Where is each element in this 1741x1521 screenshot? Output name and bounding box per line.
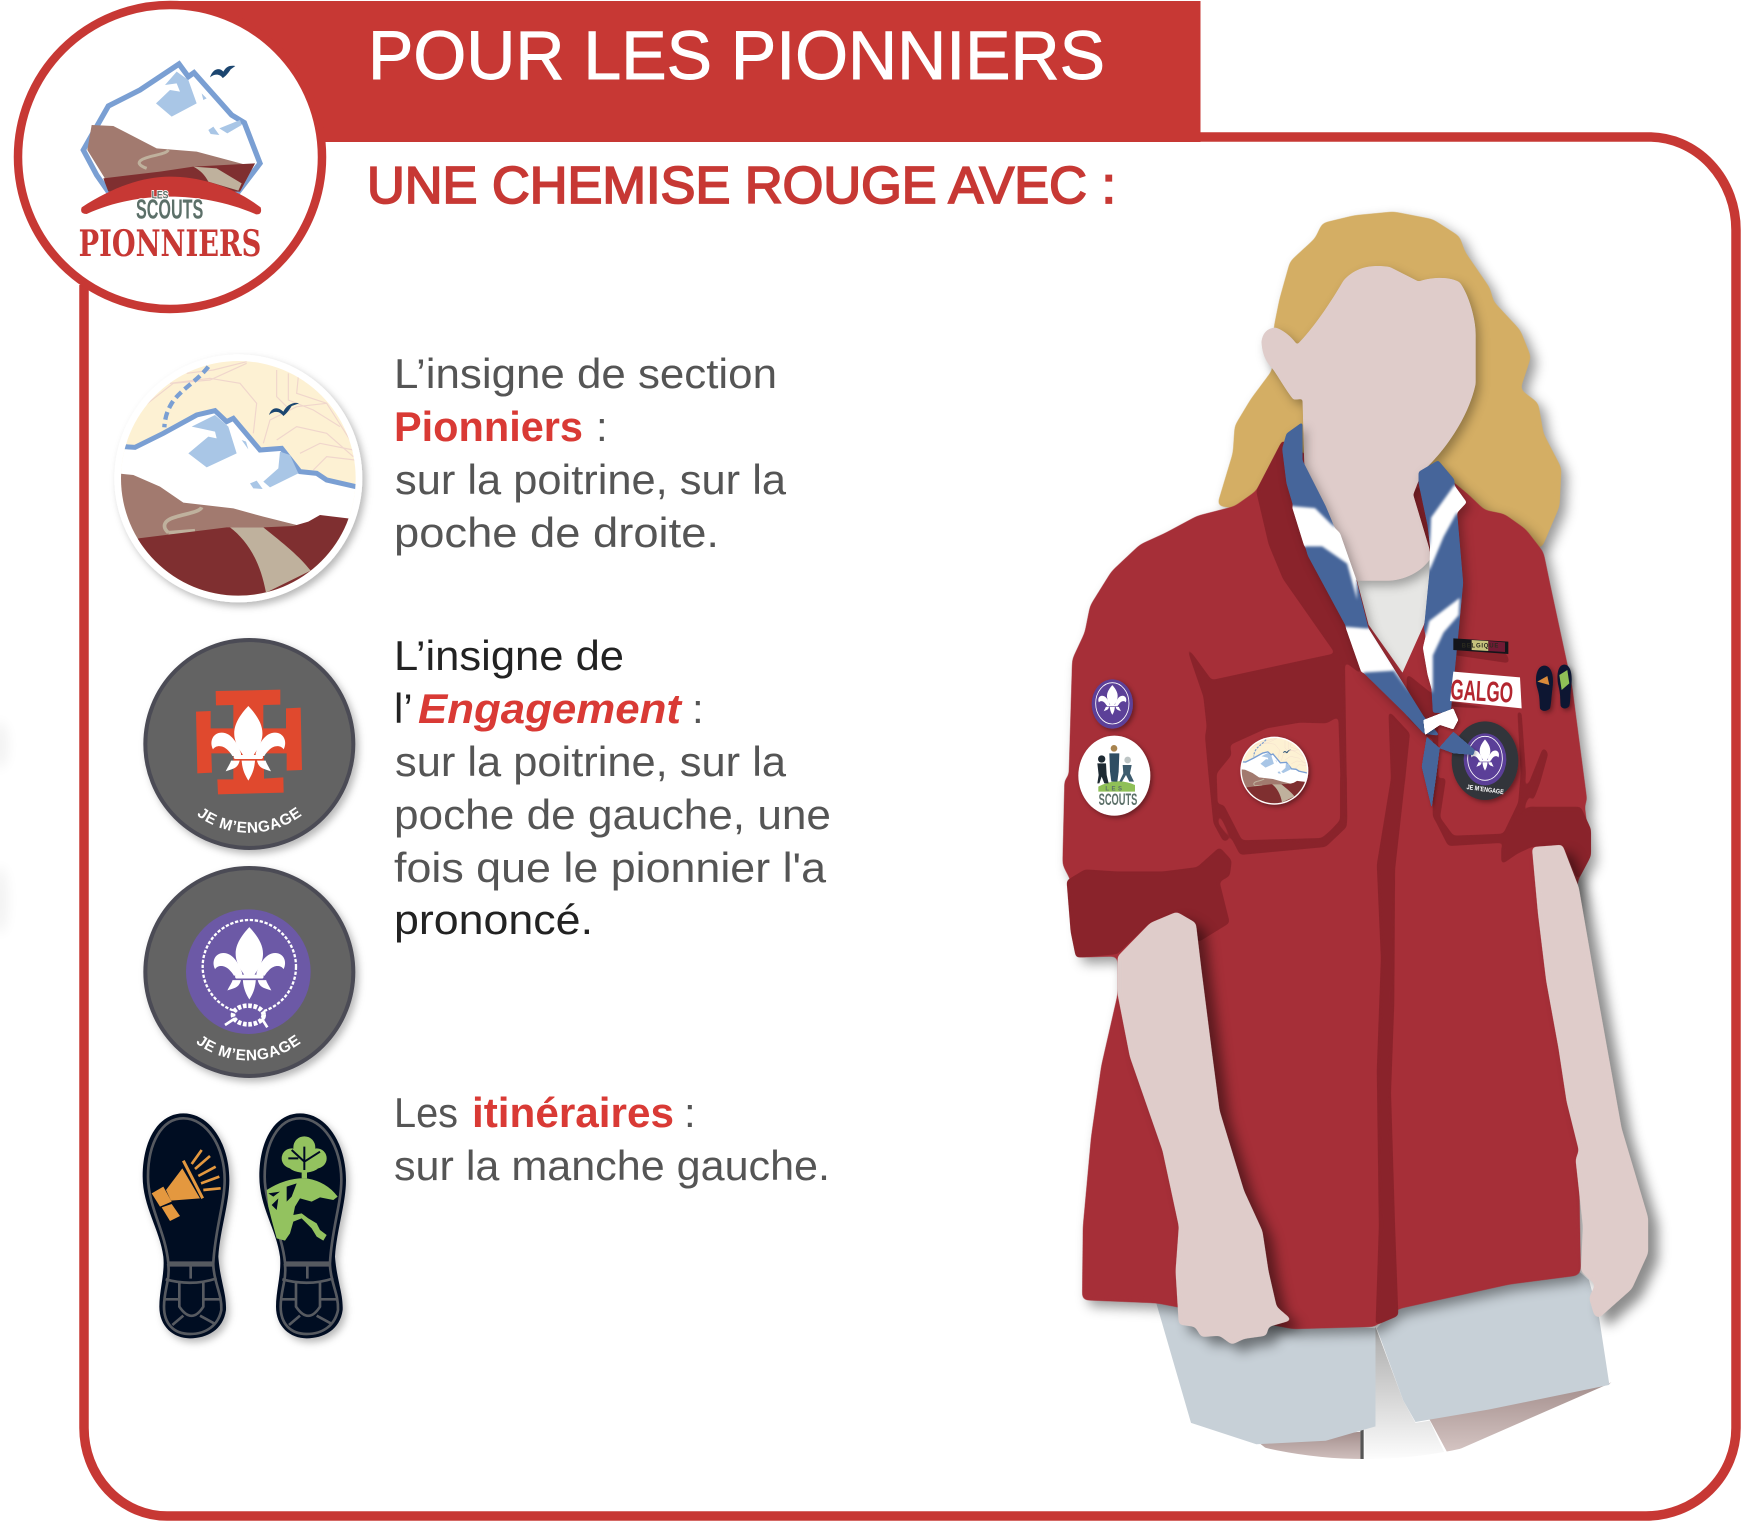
text: insigne de section <box>394 350 787 556</box>
icon: megaphone sole <box>143 1113 229 1338</box>
text: insigne de l'Engagement: poche de gauche, une <box>394 791 831 838</box>
text: itinéraires: Les <box>394 1089 458 1136</box>
purple scout badge <box>1092 679 1133 729</box>
shirt insignia <box>1078 638 1572 816</box>
black engagement badge <box>1452 721 1518 800</box>
Belgique tag: BELGIQUE <box>1462 643 1498 649</box>
text: insigne de l'Engagement: fois que le pionnier l'a <box>394 844 827 891</box>
text: insigne de l'Engagement: prononcé. <box>394 896 593 943</box>
shirt folds, collar and pockets <box>1067 439 1591 1326</box>
text: insigne de section: sur la poitrine, sur la <box>395 456 787 503</box>
text: insigne de l'Engagement: Engagement <box>418 685 683 732</box>
white Les Scouts badge: LES <box>1105 787 1122 793</box>
left edge faint shadows <box>0 721 8 934</box>
legs and shorts <box>1156 1271 1611 1463</box>
undershirt <box>1356 554 1433 673</box>
text: itinéraires: : <box>684 1089 696 1136</box>
badge: Engagement red cross <box>142 638 363 858</box>
arms <box>1118 845 1648 1345</box>
title: POUR LES PIONNIERS <box>368 17 1105 94</box>
text: insigne de l'Engagement: l’ <box>394 685 413 732</box>
logo: Les Scouts Pionniers: SCOUTS <box>136 194 203 225</box>
text: insigne de section: : <box>596 403 608 450</box>
section badge: Pionniers <box>113 354 363 607</box>
face and neck <box>1261 266 1476 581</box>
logo: Les Scouts Pionniers: PIONNIERS <box>79 223 261 265</box>
text: itinéraires: sur la manche gauche. <box>394 1142 830 1189</box>
shirt body <box>1062 439 1591 1329</box>
text: itinéraires: itinéraires <box>472 1089 674 1136</box>
name tag GALGO <box>1450 672 1522 710</box>
Belgique tag <box>1453 638 1508 654</box>
badge: Engagement red cross: JE M’ENGAGE <box>198 806 302 833</box>
badge: Engagement purple world scout: JE M’ENGAGE <box>196 1034 301 1060</box>
mini route soles <box>1536 665 1572 711</box>
neckerchief <box>1282 422 1467 736</box>
text: insigne de l'Engagement: sur la poitrine, sur la <box>395 738 787 785</box>
subtitle: UNE CHEMISE ROUGE AVEC : <box>367 157 1116 215</box>
logo: Les Scouts Pionniers <box>18 5 322 309</box>
hair <box>1217 211 1561 548</box>
icon: earth and tree sole <box>259 1113 346 1338</box>
logo: Les Scouts Pionniers: LES <box>152 190 168 202</box>
text: insigne de l'Engagement <box>394 632 831 943</box>
text: insigne de section: L’insigne de section <box>394 350 777 397</box>
text: insigne de section: poche de droite. <box>394 509 719 556</box>
black engagement badge: JE M’ENGAGE <box>1466 784 1505 796</box>
text: itinéraires <box>394 1089 830 1189</box>
badge: Engagement purple world scout <box>142 866 363 1086</box>
white Les Scouts badge <box>1078 736 1150 816</box>
icons: itinéraires shoe soles <box>143 1113 346 1338</box>
text: insigne de section: Pionniers <box>394 403 583 450</box>
text: insigne de l'Engagement: L’insigne de <box>394 632 624 679</box>
text: insigne de l'Engagement: : <box>692 685 704 732</box>
white Les Scouts badge: SCOUTS <box>1099 790 1137 809</box>
figure: pioneer wearing the red shirt <box>1062 211 1648 1463</box>
title banner <box>170 1 1200 142</box>
name tag GALGO: GALGO <box>1450 674 1514 710</box>
neckerchief knot and tails <box>1422 708 1475 808</box>
mini section badge <box>1240 737 1309 806</box>
